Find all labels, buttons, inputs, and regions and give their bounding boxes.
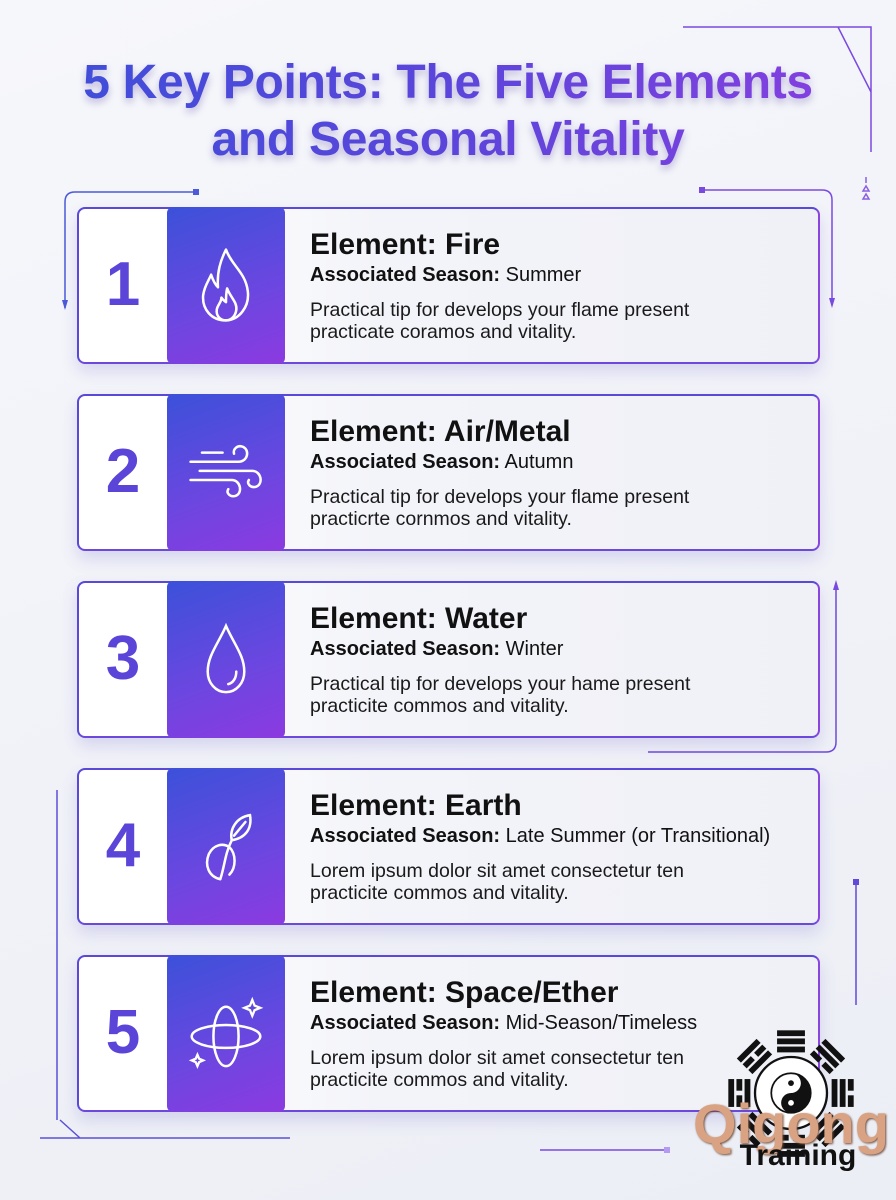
icon: wind <box>167 394 285 550</box>
icon: fire <box>167 206 285 364</box>
text: Practical tip for develops your flame present <box>310 486 689 508</box>
text: Lorem ipsum dolor sit amet consectetur ten <box>310 1047 684 1069</box>
text: Element: Space/Ether <box>310 976 618 1009</box>
text: Associated Season: Autumn <box>310 451 573 473</box>
number 5: 5 <box>106 998 140 1067</box>
number 3: 3 <box>106 624 140 693</box>
text: Element: Water <box>310 602 527 635</box>
text: Element: Fire <box>310 228 500 261</box>
text: practicrte cornmos and vitality. <box>310 508 572 530</box>
text: practicite commos and vitality. <box>310 1069 569 1091</box>
text: Associated Season: Mid-Season/Timeless <box>310 1012 697 1034</box>
title: 5 Key Points: The Five Elements <box>83 56 813 109</box>
text: practicite commos and vitality. <box>310 695 569 717</box>
text: Element: Earth <box>310 789 522 822</box>
text: practicite commos and vitality. <box>310 882 569 904</box>
icon: orbit <box>167 954 285 1112</box>
text: Associated Season: Late Summer (or Transitional) <box>310 825 770 847</box>
text <box>310 976 697 1091</box>
text <box>310 602 690 717</box>
brand text: Qigong <box>693 1092 889 1155</box>
text <box>310 228 690 343</box>
number 1: 1 <box>106 250 140 319</box>
logo: Qigong Training <box>693 1030 889 1172</box>
panel: fire <box>77 207 820 364</box>
text: Practical tip for develops your flame present <box>310 299 689 321</box>
text: Practical tip for develops your hame present <box>310 673 690 695</box>
text: Associated Season: Winter <box>310 638 563 660</box>
title: and Seasonal Vitality <box>212 113 684 166</box>
number 4: 4 <box>106 811 140 880</box>
text: Lorem ipsum dolor sit amet consectetur ten <box>310 860 684 882</box>
number 2: 2 <box>106 437 140 506</box>
text <box>310 789 770 904</box>
panel: water <box>77 581 820 738</box>
text: Element: Air/Metal <box>310 415 571 448</box>
panel: earth <box>77 768 820 925</box>
icon: water drop <box>167 580 285 738</box>
title <box>0 54 896 168</box>
icon: bagua yin-yang <box>728 1030 854 1157</box>
logo: Qigong Training: Training <box>740 1139 856 1172</box>
text: practicate coramos and vitality. <box>310 321 576 343</box>
panel: space/ether <box>77 955 820 1112</box>
panel: air/metal <box>77 394 820 551</box>
text <box>310 415 690 530</box>
text: Associated Season: Summer <box>310 264 581 286</box>
icon: sprout <box>167 768 285 924</box>
